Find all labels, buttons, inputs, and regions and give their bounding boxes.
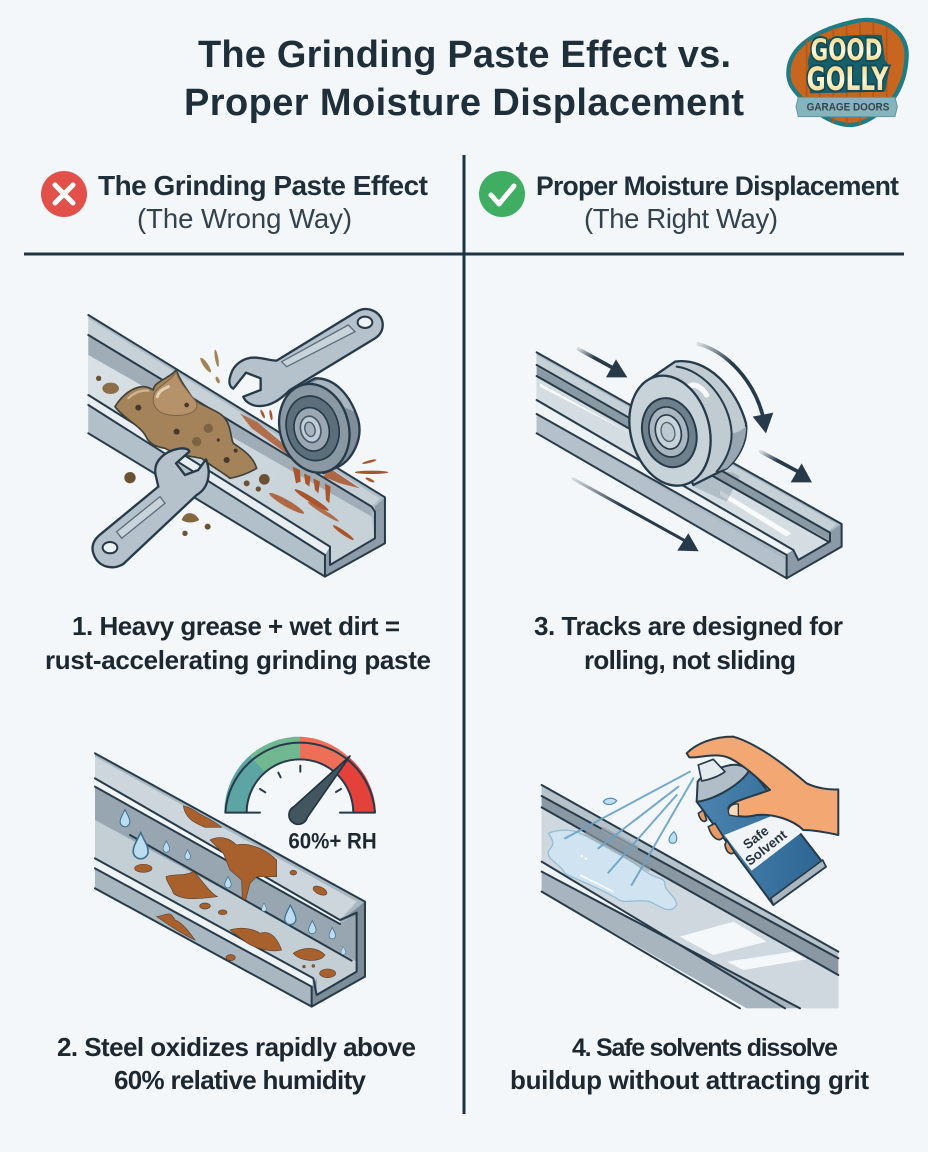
left column header: wrong way: The Grinding Paste Effect: [98, 170, 428, 201]
track: [88, 315, 385, 577]
illustration 3: wheel rolling along clean track: [537, 344, 842, 578]
arrow: wheel rotation: [698, 344, 773, 433]
rust patches: [135, 806, 336, 978]
can label: Safe: [740, 823, 772, 852]
caption 4: [510, 1034, 869, 1095]
wheel: [618, 361, 746, 495]
dividers: [24, 155, 904, 1114]
caption 2: 60% relative humidity: [114, 1065, 367, 1095]
arrow: motion top-left: [578, 349, 627, 377]
humidity gauge: [224, 737, 376, 824]
wrench upper: [229, 309, 383, 406]
caption 2: [57, 1032, 416, 1095]
spray can: [697, 759, 826, 905]
dirt specks: [96, 350, 270, 536]
title: The Grinding Paste Effect vs.: [198, 34, 731, 76]
arrow: motion bottom: [573, 479, 699, 551]
title: Proper Moisture Displacement: [184, 82, 744, 124]
caption 3: 3. Tracks are designed for: [534, 611, 843, 641]
caption 1: rust-accelerating grinding paste: [45, 645, 431, 675]
can label: [724, 810, 803, 871]
caption 3: [534, 611, 843, 675]
left column header: wrong way: [41, 170, 428, 234]
paste blob: [115, 370, 257, 478]
caption 2: 2. Steel oxidizes rapidly above: [57, 1032, 416, 1062]
wrench lower: [93, 448, 209, 567]
icon: green check: [479, 171, 525, 217]
spray lines: [565, 772, 693, 885]
logo: Good Golly Garage Doors: GARAGE DOORS: [807, 102, 889, 114]
illustration 1: grease paste on track with wrenches and wheel: [88, 309, 388, 577]
puddle: [548, 828, 677, 910]
title: [184, 34, 744, 124]
caption 1: 1. Heavy grease + wet dirt =: [72, 611, 400, 641]
right column header: right way: [479, 171, 899, 234]
can label: Solvent: [742, 827, 790, 869]
caption 1: [45, 611, 431, 675]
arrow: motion right: [761, 452, 812, 482]
track: [537, 352, 842, 578]
logo: Good Golly Garage Doors: GOOD: [811, 33, 882, 67]
caption 3: rolling, not sliding: [584, 645, 796, 675]
rust streaks: [240, 409, 388, 542]
track: [95, 753, 365, 1007]
caption 4: 4. Safe solvents dissolve: [572, 1034, 838, 1062]
illustration 4: solvent spray on track: [542, 737, 838, 1008]
right column header: right way: (The Right Way): [584, 203, 778, 234]
hand holding can: [687, 737, 838, 854]
caption 4: buildup without attracting grit: [510, 1065, 869, 1095]
illustration 2: rusting wet track and humidity gauge: [95, 737, 377, 1007]
logo: Good Golly Garage Doors: GOLLY: [807, 60, 889, 98]
logo: Good Golly Garage Doors: [788, 20, 907, 125]
track: [542, 785, 838, 1008]
water droplets: [120, 810, 346, 955]
droplets: [603, 798, 677, 843]
right column header: right way: Proper Moisture Displacement: [536, 171, 899, 201]
left column header: wrong way: (The Wrong Way): [137, 203, 352, 234]
wheel: [270, 376, 359, 481]
gauge label: 60%+ RH: [288, 828, 377, 853]
icon: red x: [41, 171, 87, 217]
